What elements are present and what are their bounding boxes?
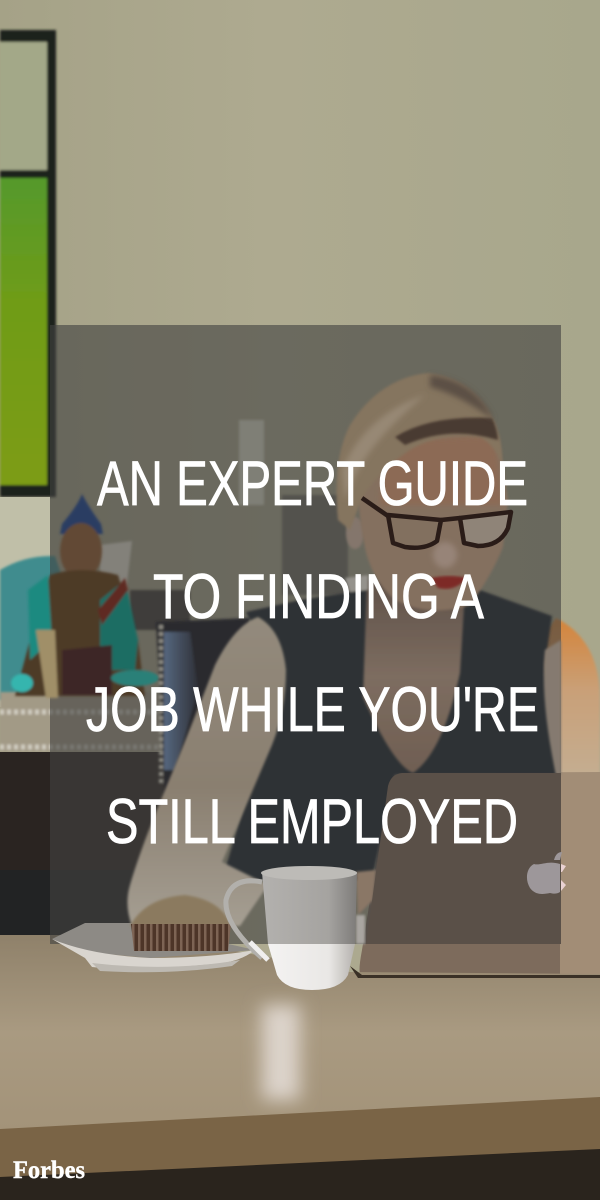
- dark cabinet: [0, 752, 170, 942]
- plate: [52, 923, 255, 972]
- laptop base shadow: [350, 966, 600, 978]
- table reflection: [262, 1005, 300, 1100]
- white cushion: [100, 541, 132, 600]
- woman: [127, 373, 561, 944]
- translucent dark panel: [50, 325, 561, 944]
- neck and chest: [363, 580, 465, 773]
- hair: [336, 373, 502, 530]
- apple logo: [527, 852, 566, 894]
- dark background block: [130, 590, 190, 630]
- table front edge: [0, 1097, 600, 1178]
- mug lower body: [268, 944, 355, 990]
- mug handle: [226, 881, 262, 958]
- woven vase: [282, 495, 348, 595]
- muffin: [130, 895, 231, 951]
- crown shadow: [430, 375, 494, 420]
- mug upper body: [262, 872, 357, 944]
- buddha hat: [60, 494, 103, 534]
- teal sofa: [0, 556, 70, 700]
- forbes logo: Forbes: [13, 1157, 85, 1184]
- coffee mug: [226, 866, 357, 990]
- title: [86, 449, 539, 857]
- plate rim: [52, 923, 255, 958]
- laptop lid: [360, 772, 600, 976]
- right arm inside panel: [544, 640, 561, 775]
- buddha statue: [11, 494, 159, 698]
- mug rim: [261, 866, 357, 880]
- table top: [0, 935, 600, 1130]
- dark hair streak: [395, 418, 498, 445]
- laptop lid inside panel: [366, 773, 561, 944]
- office chair: [156, 618, 250, 800]
- keyboard edge: [356, 915, 365, 944]
- ear: [346, 517, 364, 549]
- plate underside: [92, 960, 240, 972]
- glasses: [362, 498, 511, 548]
- lighter lower wall at left: [0, 497, 50, 707]
- nose highlight: [433, 542, 457, 568]
- pale object on wall: [239, 420, 264, 505]
- buddha body: [15, 570, 145, 696]
- framed painting: [0, 30, 56, 497]
- title line 2: TO FINDING A: [153, 562, 484, 632]
- white collar: [345, 575, 368, 592]
- lips: [431, 576, 467, 589]
- face: [357, 433, 508, 610]
- muffin wrapper: [131, 924, 231, 951]
- muffin top: [130, 895, 231, 926]
- cabinet top with studs: [0, 692, 165, 752]
- hand on keyboard: [356, 870, 376, 915]
- shadow under table: [0, 1149, 600, 1200]
- buddha head: [60, 523, 102, 579]
- dress: [222, 590, 557, 880]
- upper arm and forearm: [127, 617, 286, 926]
- forehead shading: [380, 435, 503, 505]
- right arm: [540, 618, 600, 780]
- light hair streak: [342, 395, 425, 500]
